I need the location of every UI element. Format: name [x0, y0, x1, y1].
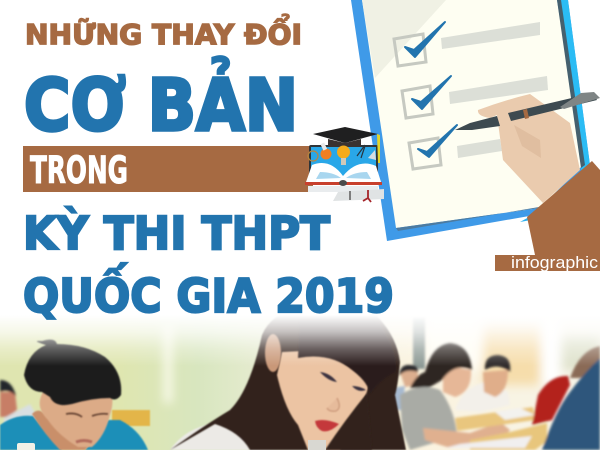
icon: graduation cap on open book	[305, 127, 384, 202]
tools	[357, 145, 365, 158]
brown band with TRONG: TRONG	[30, 149, 128, 192]
photo: students in an exam room	[0, 300, 600, 450]
laptop screen	[309, 145, 378, 185]
boy in teal shirt	[0, 340, 148, 450]
clipboard with checklist	[351, 0, 600, 255]
white fade over top of photo	[0, 298, 600, 366]
book	[306, 163, 381, 182]
diploma	[333, 189, 384, 201]
brown band with TRONG	[23, 146, 313, 192]
title: CƠ BẢN: CƠ BẢN	[24, 57, 298, 147]
background student at left	[0, 380, 38, 428]
yellow chair	[112, 410, 150, 426]
title: QUỐC GIA 2019: QUỐC GIA 2019	[23, 263, 394, 323]
check row 3	[409, 125, 502, 169]
paper sheet	[362, 0, 583, 228]
infographic tag: infographic	[511, 253, 599, 272]
dark pillar	[413, 317, 425, 369]
check row 2	[402, 76, 548, 118]
paper fold	[362, 0, 446, 78]
cap	[313, 127, 378, 143]
pen	[455, 92, 600, 130]
bulb	[337, 146, 350, 158]
check row 1	[394, 22, 540, 66]
middle students	[392, 343, 600, 450]
atom	[308, 151, 318, 161]
hand	[478, 94, 580, 203]
brown sleeve	[527, 161, 600, 255]
girl with long hair in foreground	[170, 305, 406, 450]
title: NHỮNG THAY ĐỔI: NHỮNG THAY ĐỔI	[25, 11, 302, 51]
clipboard board	[351, 0, 590, 241]
flask	[320, 148, 332, 160]
title: KỲ THI THPT: KỲ THI THPT	[23, 207, 330, 260]
